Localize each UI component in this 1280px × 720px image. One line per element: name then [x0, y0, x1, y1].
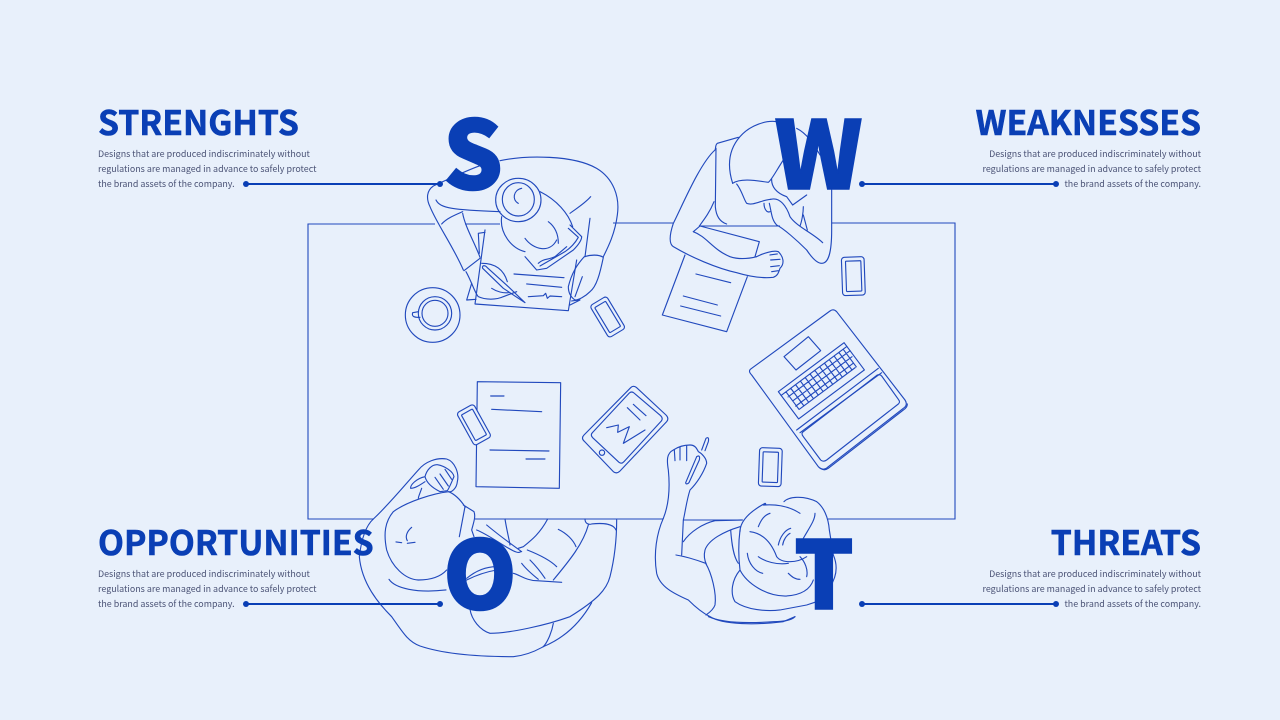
person: bottom left	[359, 459, 617, 657]
phone	[758, 448, 782, 487]
letter W: W	[775, 81, 862, 217]
heading: weaknesses: WEAKNESSES	[976, 96, 1201, 145]
paper under arm	[662, 226, 759, 332]
phone	[590, 296, 626, 338]
person: top left, writing	[405, 157, 626, 342]
text: opportunities description: the brand assets of the company.	[98, 597, 235, 610]
phone	[841, 257, 865, 296]
letter S: S	[443, 81, 503, 217]
heading: threats: THREATS	[1051, 516, 1201, 565]
person: top right, thinking	[662, 121, 865, 332]
letter O: O	[443, 501, 517, 637]
connector: strengths	[243, 181, 443, 187]
text: weaknesses description: the brand assets of the company.	[1064, 177, 1201, 190]
keyboard	[778, 343, 864, 419]
heading: strengths: STRENGHTS	[98, 96, 299, 145]
text: threats description: the brand assets of the company.	[1064, 597, 1201, 610]
panel: threats	[859, 516, 1202, 610]
letter T: T	[794, 501, 854, 637]
text: weaknesses description: regulations are managed in advance to safely protect	[982, 162, 1202, 175]
coffee cup	[405, 288, 460, 342]
text: opportunities description: Designs that are produced indiscriminately without	[98, 567, 311, 580]
text: strengths description: Designs that are produced indiscriminately without	[98, 147, 311, 160]
panel: opportunities	[98, 516, 443, 610]
panel: strengths	[98, 96, 443, 190]
document and phone on table	[456, 382, 561, 488]
connector: threats	[859, 601, 1059, 607]
text: threats description: Designs that are produced indiscriminately without	[989, 567, 1202, 580]
phone	[456, 404, 491, 446]
heading: opportunities: OPPORTUNITIES	[98, 516, 374, 565]
connector: opportunities	[243, 601, 443, 607]
text: threats description: regulations are managed in advance to safely protect	[982, 582, 1202, 595]
text: strengths description: the brand assets of the company.	[98, 177, 235, 190]
paper under writer's hand	[467, 230, 580, 311]
panel: weaknesses	[859, 96, 1202, 190]
text: opportunities description: regulations are managed in advance to safely protect	[98, 582, 317, 595]
tablet	[582, 386, 668, 473]
text: weaknesses description: Designs that are produced indiscriminately without	[989, 147, 1202, 160]
meeting table outline	[308, 223, 955, 520]
text: strengths description: regulations are managed in advance to safely protect	[98, 162, 317, 175]
person: bottom right	[655, 438, 836, 624]
laptop	[749, 310, 907, 487]
connector: weaknesses	[859, 181, 1059, 187]
